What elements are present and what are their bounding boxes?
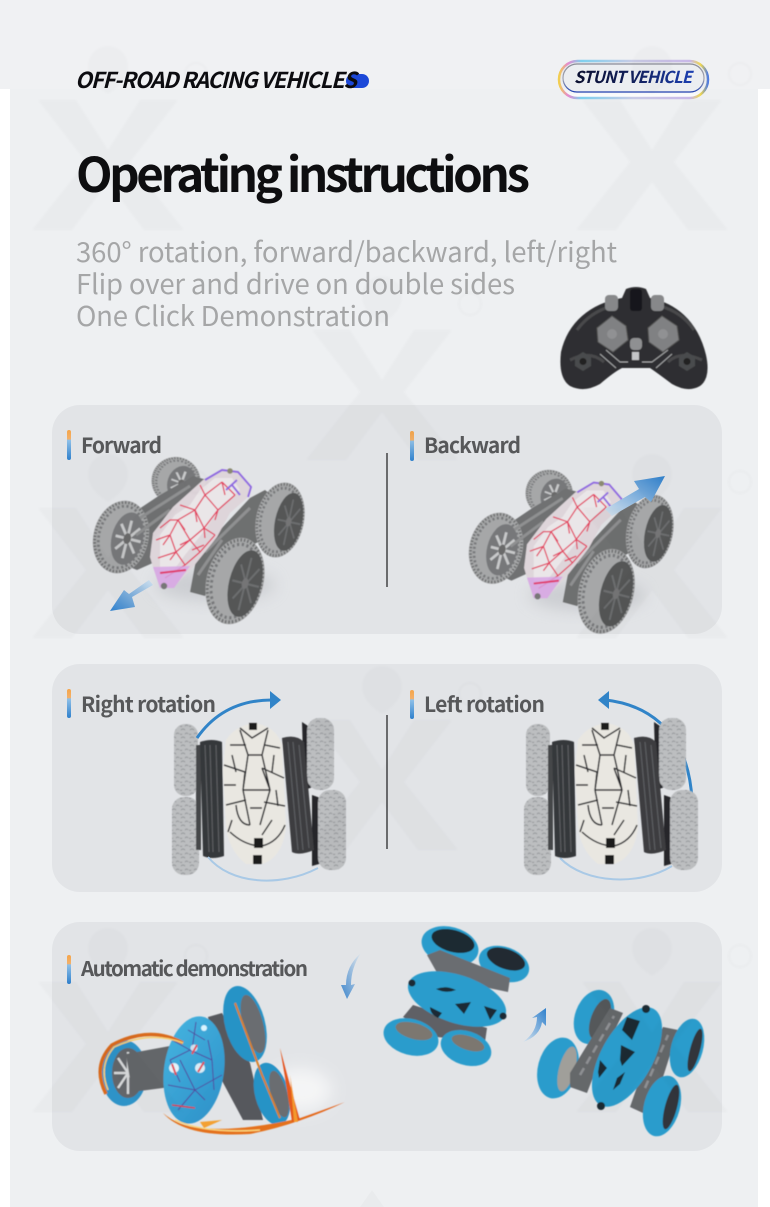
title: Operating instructions [76, 137, 530, 206]
arrow: right rotation [197, 691, 318, 881]
description text [76, 230, 617, 334]
panel: left rotation [410, 689, 698, 879]
car: blue car top view [531, 984, 710, 1141]
description text: One Click Demonstration [76, 294, 390, 334]
panel: right rotation [67, 689, 346, 881]
arrow: curved down [341, 953, 361, 999]
icon: remote control [560, 287, 708, 389]
car: blue car on its side [379, 920, 534, 1072]
panel: automatic demonstration [52, 920, 722, 1151]
panel: rotation [52, 664, 722, 892]
heading: backward: Backward [424, 430, 521, 460]
arrow: forward [110, 580, 153, 611]
panel: forward [67, 430, 311, 631]
car: top view, right rotation [172, 718, 346, 875]
arrow: curved up [523, 1008, 546, 1042]
heading: automatic demonstration: Automatic demonstration [80, 952, 308, 982]
panel: forward and backward [52, 405, 722, 640]
heading: right rotation: Right rotation [81, 689, 216, 719]
badge: stunt vehicle: STUNT VEHICLE [574, 64, 695, 88]
panel: backward [410, 430, 680, 640]
description text: 360° rotation, forward/backward, left/right [76, 230, 617, 270]
description text: Flip over and drive on double sides [76, 262, 515, 302]
arrow: backward [605, 476, 665, 516]
arrow: left rotation [560, 691, 692, 879]
car: top view, left rotation [524, 718, 698, 875]
header tag: off-road racing vehicles: OFF-ROAD RACING VEHICLES [75, 63, 359, 95]
car: forward [85, 450, 311, 631]
badge: stunt vehicle [559, 61, 708, 98]
car: backward [462, 463, 680, 640]
car: tumbling with flames [100, 981, 345, 1135]
heading: left rotation: Left rotation [424, 689, 545, 719]
heading: forward: Forward [81, 430, 162, 460]
